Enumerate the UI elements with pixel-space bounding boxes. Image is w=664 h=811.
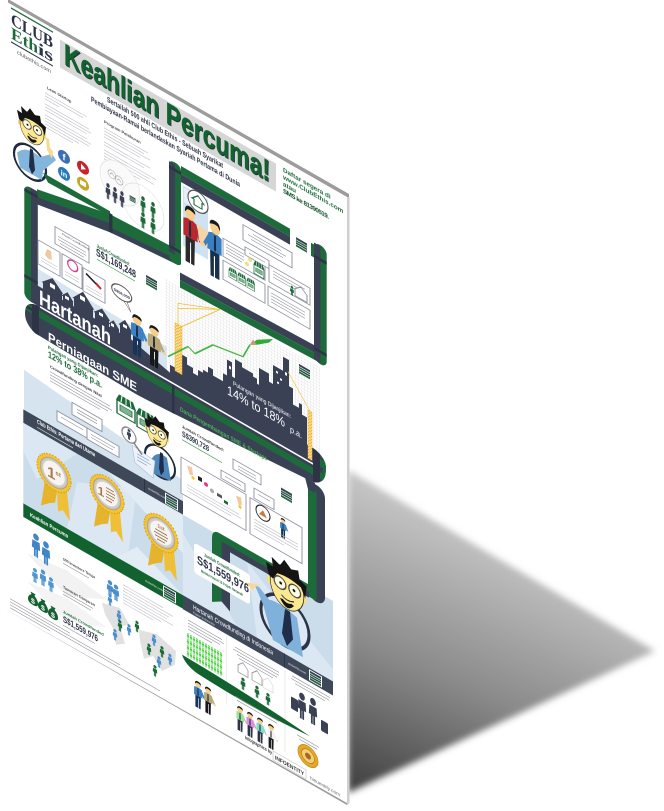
qr badge: skyline bbox=[298, 362, 311, 381]
title banner: Keahlian Percuma! bbox=[64, 37, 270, 189]
column: membership benefits icons: $ bbox=[51, 610, 56, 621]
poster artwork in isometric plane bbox=[10, 6, 343, 800]
stat: property returns on skyline: p.a. bbox=[290, 424, 302, 440]
medals: st bbox=[56, 470, 62, 480]
medals bbox=[37, 437, 178, 584]
registration call to action: www.ClubEthis.com bbox=[282, 174, 343, 215]
panel: Hartanah sky bbox=[37, 268, 167, 374]
text block: Program Pelaburan bbox=[104, 119, 156, 192]
logo: Club Ethis: CLUB bbox=[11, 9, 53, 52]
stat: S$1,169,248: S$1,169,248 bbox=[96, 247, 136, 281]
divider: white line bbox=[40, 306, 313, 465]
bar: Hartanah Crowdfunding di Indonesia: clubethis.com bbox=[288, 661, 307, 676]
band: frame top right bbox=[180, 164, 327, 372]
people: pair bbox=[194, 679, 216, 718]
cards on SME backdrop bbox=[57, 394, 119, 457]
crane right bbox=[288, 372, 312, 460]
cast shadow of poster bbox=[348, 470, 655, 793]
logo: Club Ethis: is bbox=[38, 39, 53, 66]
bar: Hartanah Crowdfunding di Indonesia: Pasar Indonesia bbox=[193, 611, 215, 627]
column: membership benefits icons: $ bbox=[41, 603, 46, 614]
people: four entrepreneurs bbox=[235, 696, 279, 753]
panel: SME cards bbox=[181, 429, 302, 564]
callout: S$1,559,976: S$1,559,976 bbox=[197, 552, 249, 596]
bar: Keahlian Percuma bbox=[23, 503, 183, 609]
venn diagram with investors bbox=[100, 151, 164, 240]
bar: Hartanah Crowdfunding di Indonesia bbox=[183, 595, 333, 695]
heading: Dana Pengembangan SME & Startups: Dana Pengembangan SME & Startups bbox=[180, 406, 267, 463]
medals: 1 bbox=[98, 483, 104, 500]
stat: S$390,728: Jumlah Crowdfunded: bbox=[182, 424, 225, 453]
social media icons: f bbox=[63, 152, 66, 164]
column: housing icons bbox=[233, 646, 279, 711]
stat: S$390,728: S$390,728 bbox=[182, 429, 209, 454]
bar: Club Ethis Pertama dari Utama bbox=[23, 409, 183, 515]
band: frame lower right bbox=[212, 424, 325, 667]
poster sheet with side edges bbox=[7, 0, 350, 805]
bar: Keahlian Percuma: clubethis.com bbox=[145, 579, 164, 593]
panel: Hartanah grid backdrop bbox=[165, 279, 320, 466]
column: membership benefits icons: Tawaran Ganjaran bbox=[63, 584, 95, 608]
band: Perniagaan SME ribbon bbox=[25, 304, 326, 482]
crane left bbox=[175, 284, 220, 396]
text block: Crowdfunding dengan Nilai bbox=[50, 364, 112, 416]
stat: S$1,559,976 total bbox=[63, 609, 104, 649]
column dividers bbox=[227, 636, 285, 752]
bar: Keahlian Percuma: Keahlian Percuma bbox=[30, 513, 69, 540]
band: Hartanah ground with houses and skyline bbox=[37, 215, 313, 464]
stat: S$1,559,976 total: Jumlah Crowdfunded bbox=[63, 609, 104, 637]
social media icons bbox=[58, 147, 89, 194]
column: membership benefits icons bbox=[27, 529, 107, 650]
registration call to action: SMS ke 81390519. bbox=[283, 188, 329, 221]
qr badge: Hartanah bbox=[145, 273, 158, 292]
panel: Hartanah cards: Proses Crowdfunding bbox=[62, 232, 89, 251]
qr badge: Hartanah right bbox=[295, 236, 308, 254]
panel: property process cards bbox=[223, 213, 310, 329]
panel: Hartanah cards bbox=[38, 217, 105, 303]
world map with investor pins bbox=[102, 590, 176, 688]
subtitle bbox=[91, 86, 240, 189]
bar: Hartanah Crowdfunding di Indonesia: Hartanah Crowdfunding di Indonesia bbox=[193, 603, 273, 657]
text block: Lean Startup bbox=[45, 84, 91, 153]
credit bbox=[245, 735, 340, 798]
medals: 1 bbox=[47, 463, 56, 484]
panel: blue medal backdrop bbox=[23, 423, 333, 682]
character: presenter with ring bbox=[14, 99, 56, 193]
footnote bbox=[10, 599, 160, 694]
registration call to action: atau bbox=[283, 181, 296, 195]
column: Indonesia figures grid bbox=[187, 619, 224, 678]
bar: Club Ethis Pertama dari Utama: clubethis.com bbox=[148, 486, 167, 501]
registration call to action: Daftar segera di bbox=[283, 167, 331, 201]
subtitle: Pembiayaan-Ramai berlandaskan Syariah Pertama di Dunia bbox=[91, 95, 240, 189]
callout: S$1,559,976: Melalui Hasrat 10 Projek Hartanah bbox=[201, 568, 243, 597]
characters: two men at property bbox=[131, 312, 166, 373]
medals: 1st bbox=[157, 523, 165, 533]
qr badge: SME bbox=[278, 482, 296, 513]
logo: Club Ethis: clubethis.com bbox=[17, 50, 51, 75]
icons: shop fronts bbox=[116, 393, 156, 437]
speech bubble: S$58,000: S$58,000 bbox=[114, 287, 130, 301]
subtitle: Sertailah 500 ahli Club Ethis - Sebuah Syarikat bbox=[107, 95, 223, 170]
callout: S$1,559,976 bbox=[194, 543, 250, 605]
speech bubble: S$58,000 bbox=[112, 280, 132, 313]
stat: SME returns: 12% to 38% p.a. bbox=[48, 350, 102, 391]
seal of Indonesia bbox=[297, 735, 319, 772]
credit: INFOENTITY bbox=[275, 755, 304, 778]
stat: S$1,169,248: Jumlah Crowdfunded: bbox=[97, 243, 130, 268]
logo: Club Ethis bbox=[11, 7, 53, 76]
heading: Perniagaan SME: Perniagaan SME bbox=[48, 329, 137, 395]
illustration: handover of house bbox=[183, 183, 222, 281]
text block: Program Pelaburan: Program Pelaburan bbox=[104, 119, 141, 145]
line chart with pencil bbox=[168, 279, 273, 417]
text block: Crowdfunding dengan Nilai: Crowdfunding dengan Nilai bbox=[50, 364, 102, 398]
band: frame top left bbox=[24, 76, 181, 388]
heading: Hartanah: Hartanah bbox=[39, 284, 111, 350]
title banner bbox=[60, 35, 276, 193]
logo: Club Ethis: Eth bbox=[11, 23, 38, 58]
stat: S$1,559,976 total: S$1,559,976 bbox=[63, 614, 98, 645]
character: analyst with magnifier bbox=[122, 397, 175, 491]
swoosh banner bbox=[182, 655, 310, 740]
social media icons: in bbox=[61, 168, 67, 181]
column: travellers with luggage bbox=[291, 675, 330, 736]
column: membership benefits icons: $ bbox=[31, 596, 36, 607]
column: membership benefits icons: 500 Investors Teruja bbox=[63, 556, 96, 580]
character: greeter with ring bbox=[246, 538, 309, 661]
callout: S$1,559,976: Jumlah Crowdfunded: bbox=[204, 553, 240, 579]
stat: S$1,169,248 bbox=[96, 243, 136, 282]
credit: Infographics by bbox=[245, 735, 272, 756]
stat: SME returns: Pulangan yang Dijanjikan: bbox=[48, 345, 98, 379]
text block: Lean Startup: Lean Startup bbox=[47, 85, 72, 104]
stat: property returns on skyline: 14% to 18% bbox=[227, 382, 285, 430]
registration call to action bbox=[282, 167, 343, 229]
icons and text: global investors bbox=[107, 575, 173, 633]
bar: Club Ethis Pertama dari Utama: Club Ethis: Pertama dari Utama bbox=[37, 419, 95, 459]
title banner: Keahlian Percuma! bbox=[65, 38, 271, 190]
panel: SME blue backdrop bbox=[24, 370, 183, 501]
stat: property returns on skyline: Pulangan yang Dijanjikan: bbox=[233, 380, 291, 420]
credit: hieuentity.com bbox=[310, 776, 340, 798]
